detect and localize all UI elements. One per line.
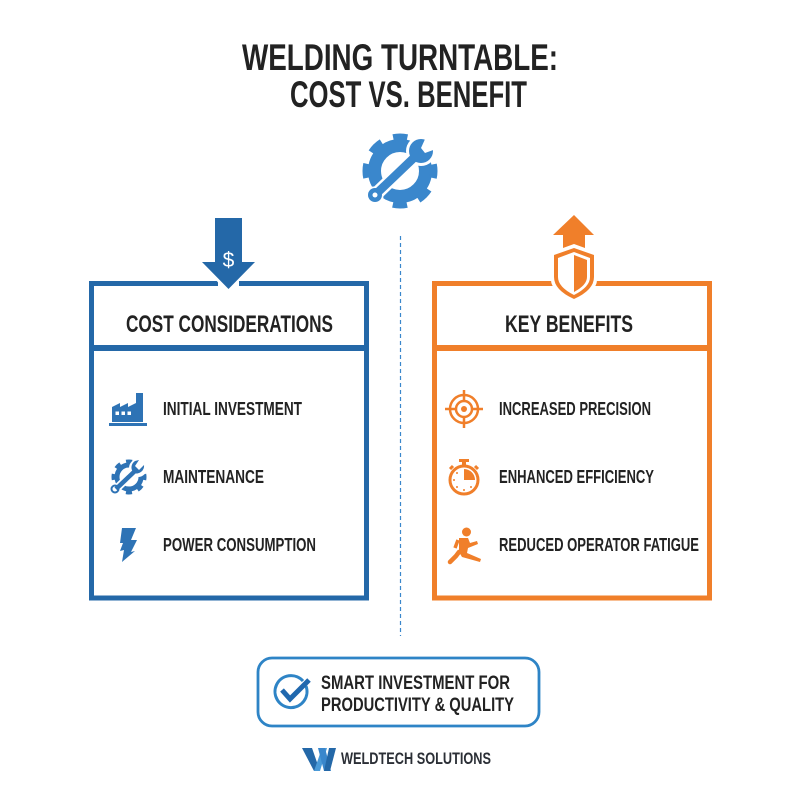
- icon: target: [445, 390, 483, 428]
- icon: dollar down arrow: [196, 218, 255, 294]
- icon: factory: [109, 393, 147, 426]
- text: initial investment: INITIAL INVESTMENT: [163, 399, 302, 419]
- text: power consumption: POWER CONSUMPTION: [163, 535, 316, 555]
- text: callout message: PRODUCTIVITY & QUALITY: [321, 695, 514, 716]
- icon: lightning bolt: [120, 528, 137, 562]
- title: COST VS. BENEFIT: [290, 74, 527, 115]
- icon: shield with up arrow: [551, 215, 597, 303]
- heading: cost considerations: COST CONSIDERATIONS: [126, 311, 333, 338]
- text: callout message: SMART INVESTMENT FOR: [321, 673, 510, 694]
- text: callout message: [321, 673, 514, 716]
- panel: key benefits: [434, 215, 710, 598]
- text: reduced operator fatigue: REDUCED OPERATOR FATIGUE: [499, 535, 699, 555]
- text: company name: WELDTECH SOLUTIONS: [341, 749, 491, 768]
- icon: running operator: [450, 528, 481, 562]
- icon: W mark: [302, 748, 336, 771]
- heading: key benefits: KEY BENEFITS: [505, 311, 633, 338]
- icon: stopwatch: [450, 459, 478, 494]
- text: enhanced efficiency: ENHANCED EFFICIENCY: [499, 467, 654, 487]
- logo: weldtech solutions: [302, 748, 491, 771]
- icon: maintenance gear and wrench: [112, 459, 147, 492]
- title: WELDING TURNTABLE:: [242, 37, 558, 78]
- callout: smart investment: [258, 658, 539, 726]
- icon: check circle: [275, 676, 309, 708]
- text: increased precision: INCREASED PRECISION: [499, 399, 651, 419]
- divider line: [400, 236, 402, 636]
- panel: cost considerations: [92, 218, 366, 598]
- text: maintenance: MAINTENANCE: [163, 467, 264, 487]
- title: [242, 37, 558, 115]
- icon: dollar down arrow: $: [223, 249, 235, 272]
- icon: gear and wrench: [364, 136, 436, 206]
